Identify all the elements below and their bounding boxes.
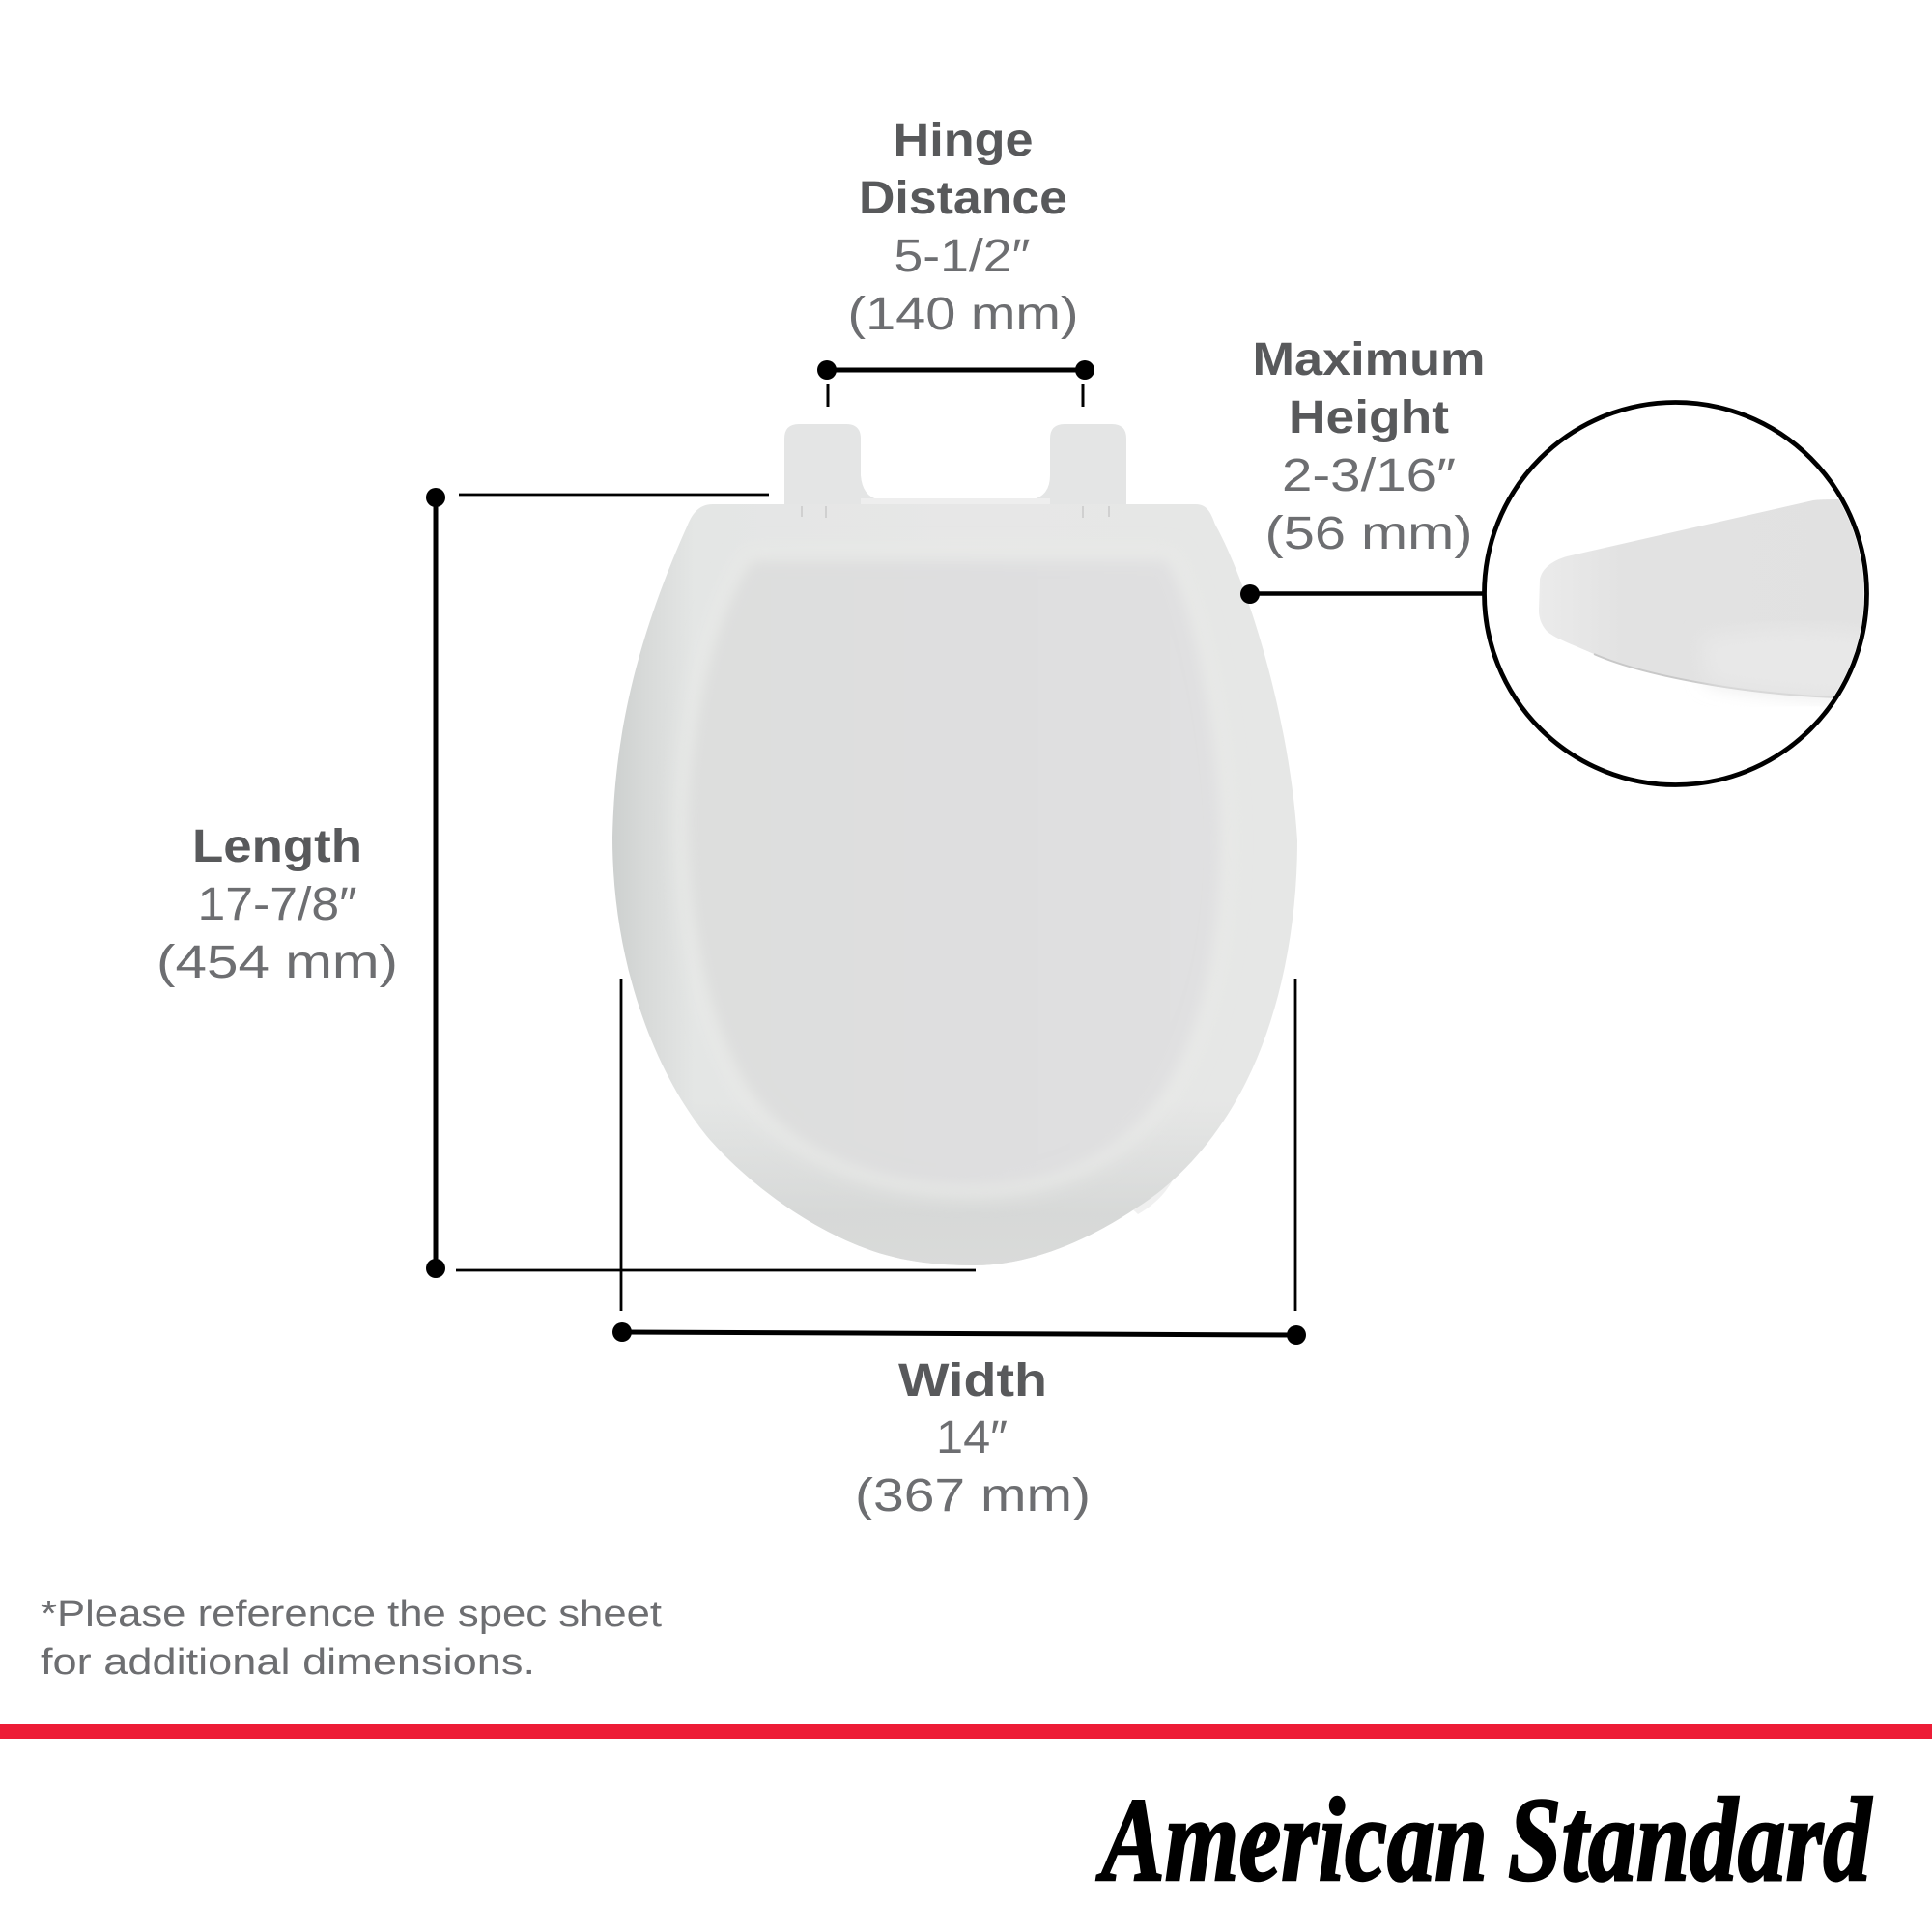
footnote: *Please reference the spec sheet bbox=[41, 1594, 663, 1634]
illustration: toilet seat, top view bbox=[612, 424, 1298, 1267]
bumper at lower right bbox=[1121, 1164, 1176, 1214]
label: hinge distance: Distance bbox=[859, 173, 1067, 224]
label: hinge distance bbox=[848, 115, 1078, 340]
label: hinge distance: 5-1/2″ bbox=[895, 231, 1030, 282]
footnote: for additional dimensions. bbox=[41, 1642, 535, 1683]
brand logo: American Standard bbox=[1095, 1774, 1873, 1906]
label: length bbox=[156, 821, 398, 988]
dimension: length bbox=[426, 488, 976, 1278]
label: maximum height: Height bbox=[1289, 392, 1449, 443]
label: maximum height: Maximum bbox=[1252, 334, 1486, 385]
label: maximum height: 2-3/16″ bbox=[1282, 450, 1456, 501]
brand logo: American Standard: American bbox=[1095, 1774, 1488, 1906]
label: maximum height bbox=[1252, 334, 1486, 559]
label: length: 17-7/8″ bbox=[197, 879, 357, 930]
hinge brackets bbox=[784, 424, 1126, 508]
label: length: Length bbox=[192, 821, 362, 872]
footnote bbox=[41, 1594, 663, 1683]
seat lid bbox=[612, 504, 1297, 1265]
hinge slot marks bbox=[802, 506, 1109, 518]
label: width: (367 mm) bbox=[855, 1470, 1091, 1521]
label: length: (454 mm) bbox=[156, 937, 398, 988]
dimension: hinge distance bbox=[817, 360, 1094, 407]
label: width: Width bbox=[898, 1355, 1047, 1406]
label: width bbox=[855, 1355, 1091, 1521]
label: width: 14″ bbox=[936, 1412, 1008, 1463]
callout: side profile of seat height bbox=[1240, 402, 1874, 784]
label: maximum height: (56 mm) bbox=[1265, 508, 1472, 559]
label: hinge distance: Hinge bbox=[893, 115, 1034, 166]
label: hinge distance: (140 mm) bbox=[848, 289, 1078, 340]
seat shading bbox=[738, 1154, 1190, 1265]
red divider bar bbox=[0, 1724, 1932, 1739]
side profile of seat bbox=[1539, 499, 1874, 699]
inner panel bbox=[688, 560, 1220, 1185]
dimension: width bbox=[612, 979, 1306, 1345]
